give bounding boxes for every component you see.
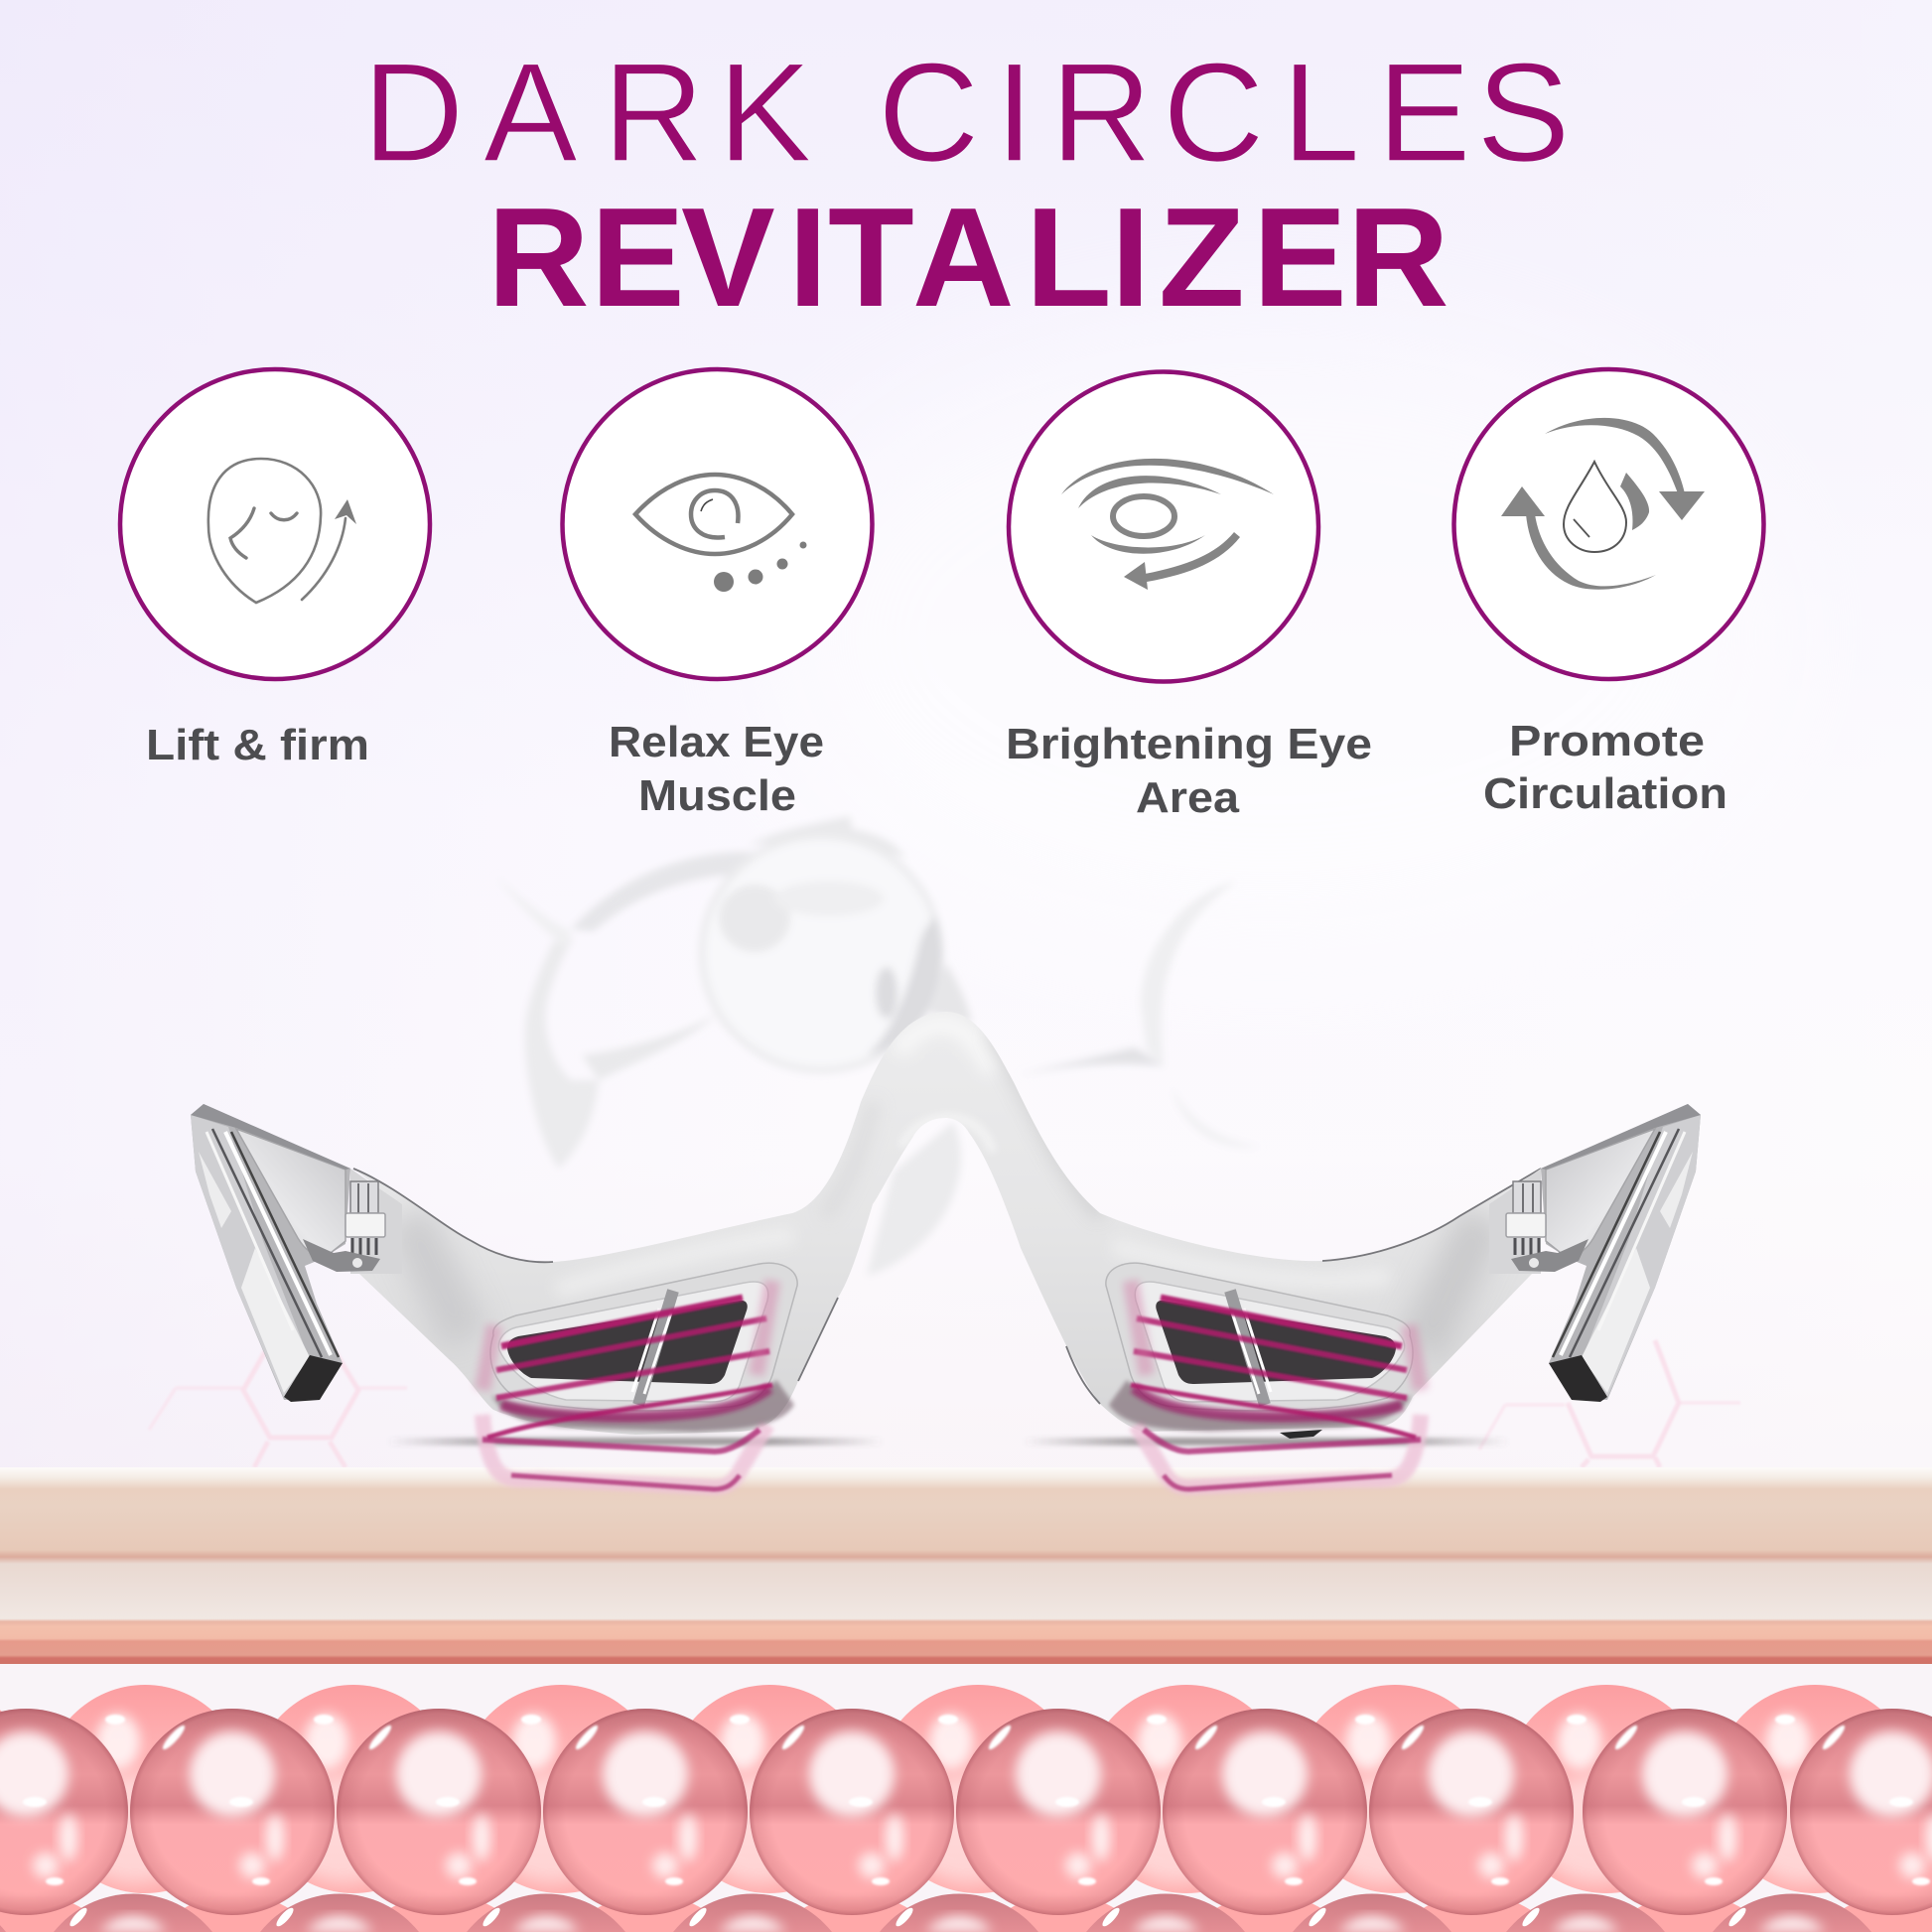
hexagon pattern right — [1479, 1340, 1740, 1467]
device — [191, 1003, 1701, 1489]
icon: water drop with circular arrows — [1501, 418, 1705, 590]
pale lower bead row — [0, 1894, 1932, 1932]
icon circle — [562, 369, 872, 679]
feature: promote circulation — [1453, 369, 1763, 818]
hexagon pattern left — [149, 1343, 407, 1467]
body edge highlights — [353, 1169, 1541, 1404]
icon: eye with brow and arrow — [1061, 459, 1274, 590]
front bead row — [0, 1709, 1932, 1915]
icon circle — [1453, 369, 1763, 679]
label line 2: Muscle — [638, 771, 796, 820]
label: Promote — [1509, 717, 1705, 765]
black sensor detail — [1280, 1430, 1322, 1439]
icon: face with upward arrow — [208, 459, 356, 603]
skin surface band — [0, 1467, 1932, 1664]
right light pad — [1106, 1263, 1421, 1489]
label line 2: Circulation — [1483, 769, 1727, 818]
label: Lift & firm — [146, 721, 369, 769]
feature: brightening eye area — [1006, 371, 1372, 822]
label: Relax Eye — [609, 718, 824, 766]
left temple arm — [191, 1104, 402, 1402]
bottom bead row — [0, 1894, 1871, 1932]
feature: lift and firm — [120, 369, 430, 769]
icon: eye with dots — [635, 475, 806, 592]
icon circle — [1009, 371, 1318, 681]
title line 1: DARK CIRCLES — [362, 34, 1571, 192]
left light pad — [483, 1263, 797, 1489]
label line 2: Area — [1136, 773, 1240, 822]
back bead row — [0, 1685, 1932, 1893]
label: Brightening Eye — [1006, 720, 1372, 768]
icon circle — [120, 369, 430, 679]
title line 2: REVITALIZER — [487, 179, 1449, 337]
title — [362, 34, 1571, 337]
ground shadow under device — [387, 1438, 1509, 1446]
pink beads — [0, 1685, 1932, 1932]
device body with nose bridge — [338, 1003, 1559, 1440]
feature: relax eye muscle — [562, 369, 872, 820]
right temple arm — [1489, 1104, 1701, 1402]
ghost bubbles behind device — [496, 816, 1261, 1276]
